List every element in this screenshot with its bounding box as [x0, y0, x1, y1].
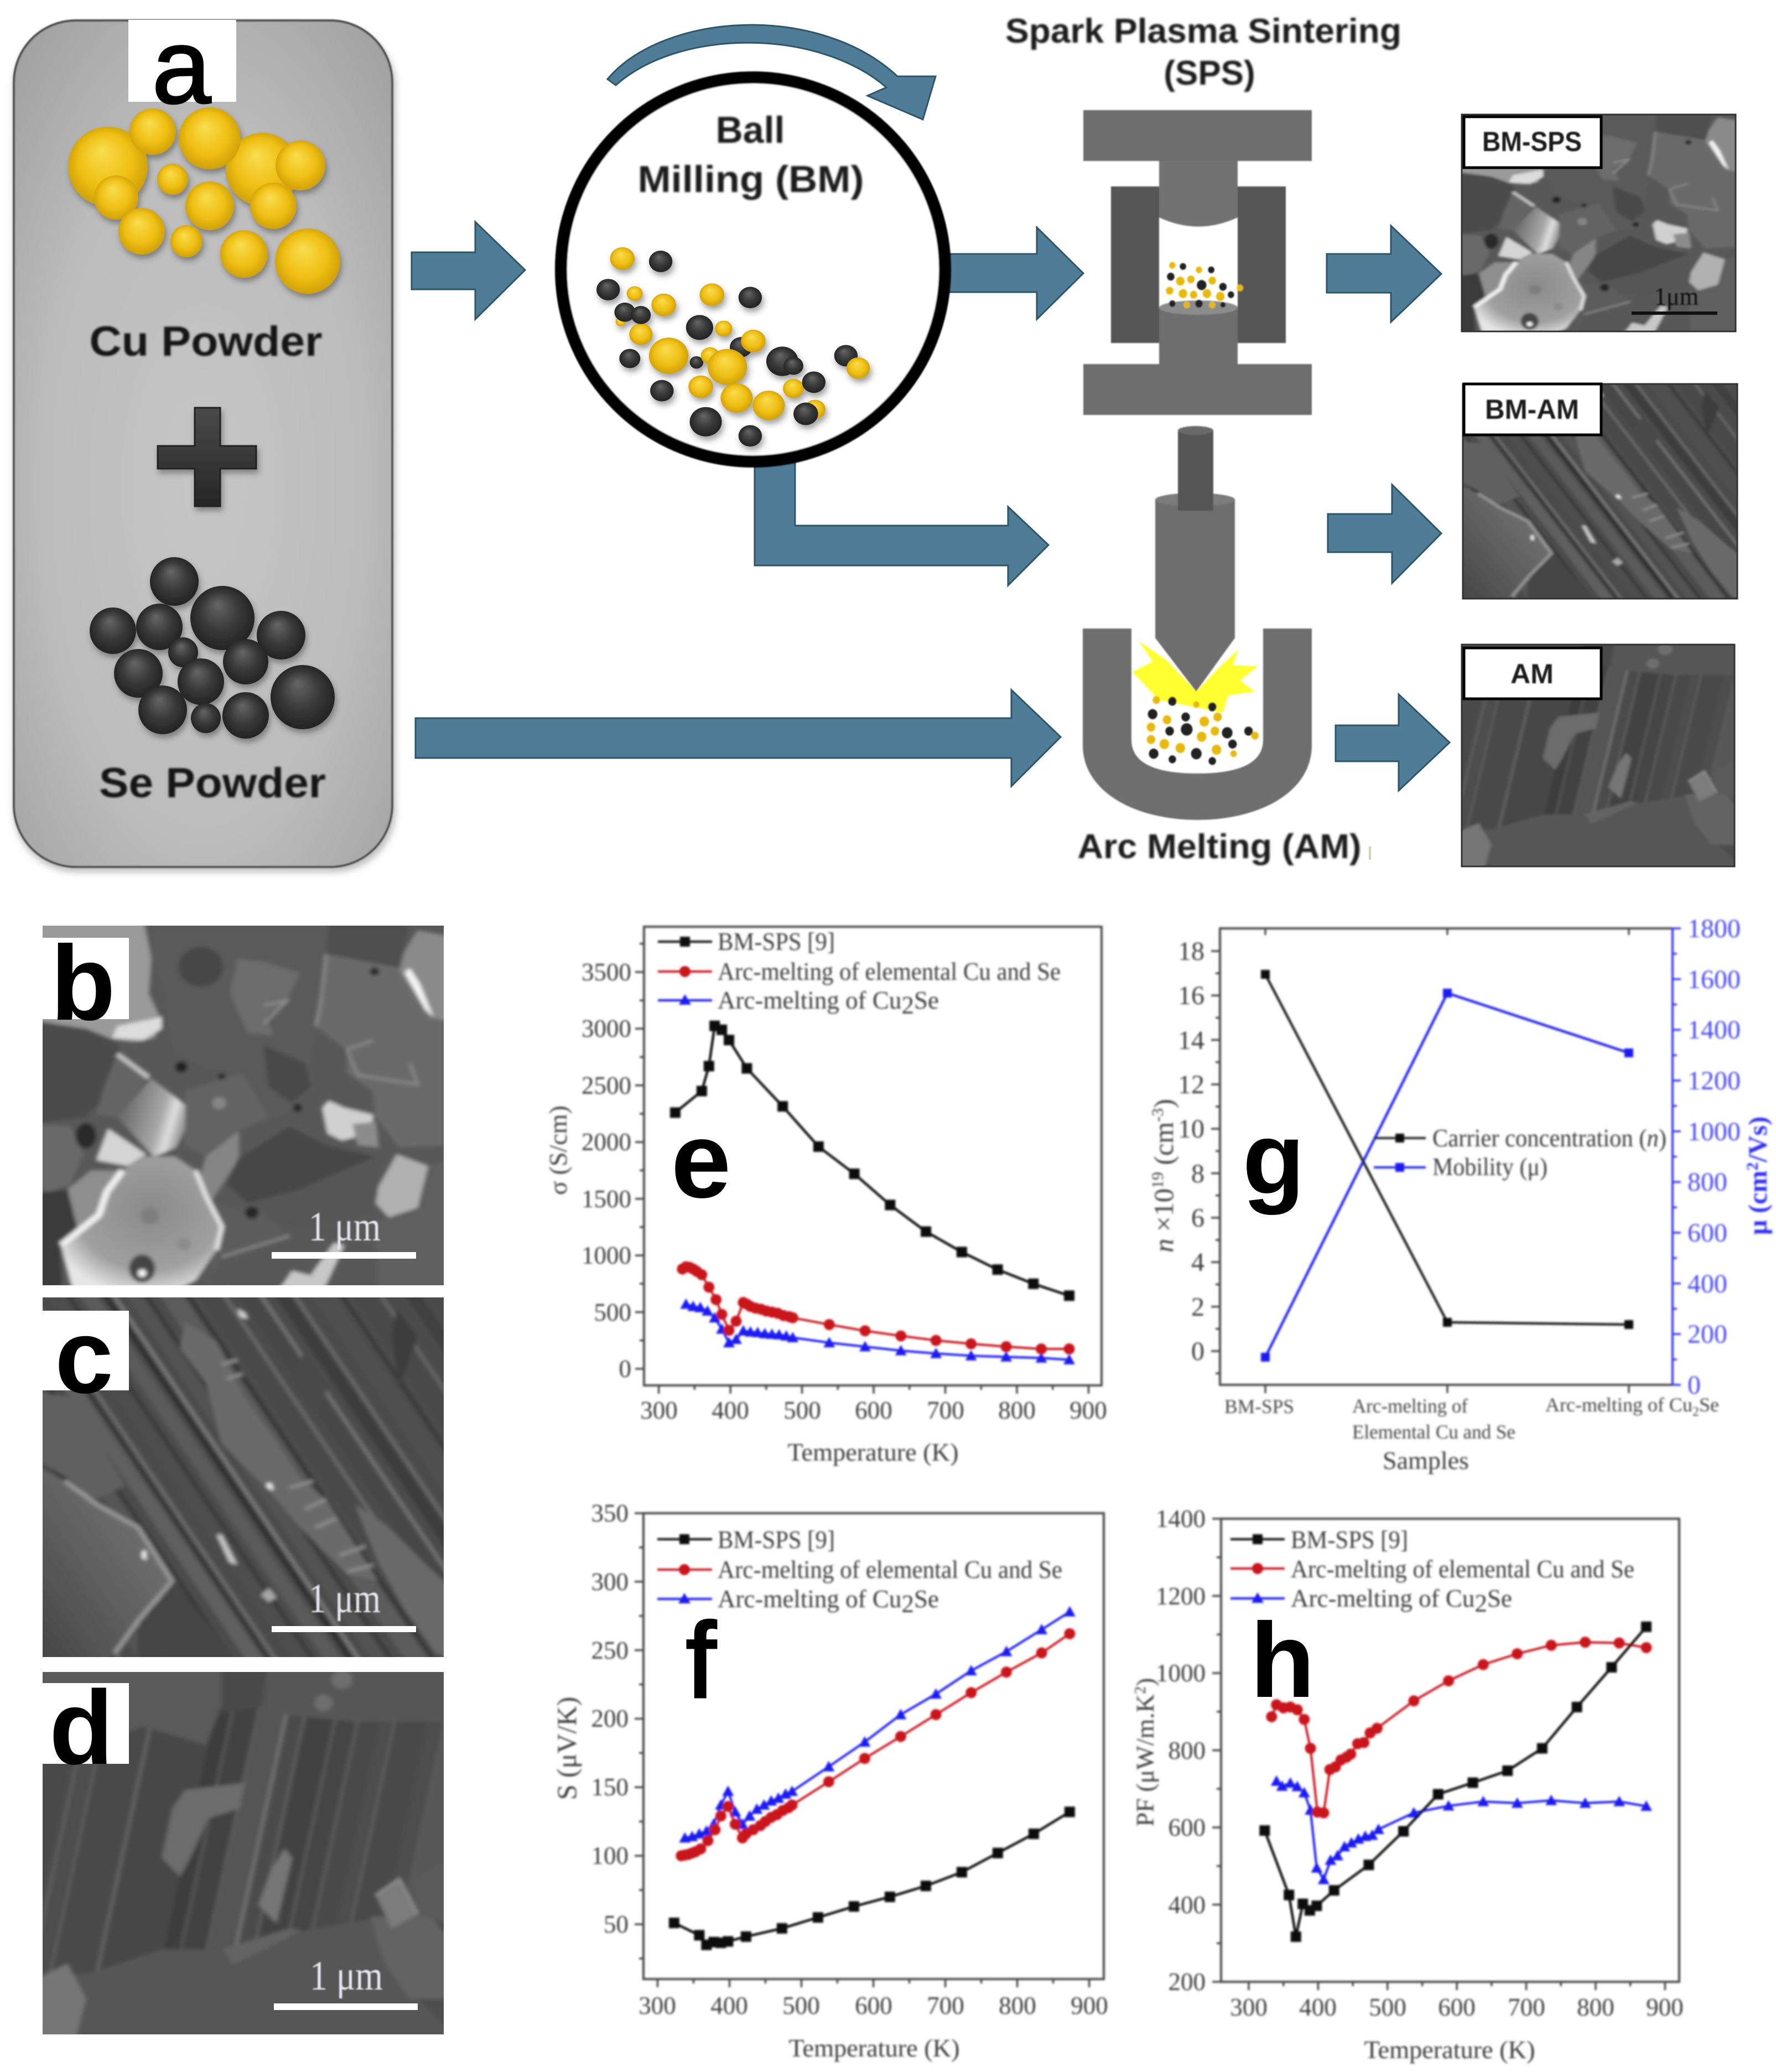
label d: d — [49, 1669, 113, 1787]
category labels g: 2 — [1692, 1405, 1699, 1419]
legend e — [658, 928, 1061, 1019]
diagram: SPS press — [1083, 110, 1312, 415]
category labels g: Se — [1699, 1394, 1719, 1416]
arrow: powders to arc melting — [416, 690, 1061, 786]
legend h: BM-SPS [9] — [1291, 1526, 1408, 1554]
tick labels e: 2000 — [581, 1128, 631, 1156]
label g: g — [1243, 1101, 1305, 1215]
tick labels f: 150 — [591, 1773, 629, 1801]
left tick labels g: 10 — [1178, 1114, 1204, 1144]
right tick labels g: 1200 — [1687, 1066, 1741, 1095]
axis titles g — [1148, 1099, 1773, 1474]
scale bar d: 1 μm — [310, 1953, 383, 1999]
left tick labels g — [1178, 937, 1204, 1366]
axis titles g: Samples — [1383, 1446, 1469, 1474]
axis titles f — [551, 1697, 959, 2062]
tick labels e: 900 — [1069, 1396, 1107, 1424]
panel a: process flow — [14, 7, 1776, 875]
right tick labels g: 400 — [1687, 1269, 1727, 1299]
tick labels f: 200 — [591, 1705, 629, 1732]
tick labels e: 700 — [927, 1396, 964, 1424]
series e — [675, 1026, 1069, 1360]
tick labels h: 600 — [1438, 1993, 1476, 2021]
axis titles g: 2 — [1743, 1162, 1762, 1171]
label b: b — [50, 923, 116, 1042]
right tick labels g: 600 — [1687, 1218, 1727, 1248]
micrograph: BM-SPS: 1μm — [1654, 282, 1699, 310]
right tick labels g: 1600 — [1687, 965, 1741, 994]
right tick labels g: 1800 — [1687, 914, 1741, 943]
tick labels f: 50 — [604, 1910, 629, 1938]
series f — [674, 1612, 1069, 1945]
axis titles f: Temperature (K) — [789, 2034, 959, 2062]
tick labels e — [581, 958, 1107, 1424]
tick labels e: 2500 — [581, 1072, 631, 1099]
tick labels e: 500 — [594, 1299, 631, 1326]
panel c: SEM micrograph — [0, 1285, 704, 1670]
axis titles h: PF (μW/m.K — [1131, 1694, 1159, 1826]
series h — [1265, 1627, 1647, 1936]
legend h: 2 — [1474, 1590, 1487, 1617]
scale bar d — [274, 1953, 418, 2010]
heading: Spark Plasma Sintering — [1005, 12, 1401, 92]
chart f: Seebeck coefficient vs temperature — [551, 1499, 1108, 2062]
tick labels h: 1400 — [1156, 1505, 1206, 1533]
tick labels e: 3500 — [581, 958, 631, 986]
arrow: ball mill to SPS — [941, 227, 1083, 319]
tick labels f: 300 — [638, 1992, 676, 2019]
right tick labels g: 0 — [1687, 1370, 1701, 1400]
label c — [43, 1298, 129, 1415]
tick labels h: 1200 — [1156, 1582, 1206, 1610]
left tick labels g: 8 — [1191, 1159, 1204, 1188]
icon: plus — [158, 408, 256, 506]
tick labels e: 1000 — [581, 1242, 631, 1269]
axis titles h — [1131, 1678, 1535, 2064]
legend g: Carrier concentration (n) — [1432, 1124, 1666, 1152]
micrograph: BM-AM — [1295, 377, 1776, 606]
tick labels e: 0 — [619, 1355, 631, 1383]
tick labels h: 800 — [1577, 1993, 1614, 2021]
icon: mixed milling balls — [596, 247, 870, 446]
heading: Spark Plasma Sintering: Spark Plasma Sintering — [1005, 12, 1401, 50]
legend f: Arc-melting of Cu — [718, 1585, 901, 1613]
tick labels f: 600 — [855, 1992, 892, 2019]
left tick labels g: 18 — [1178, 937, 1204, 966]
axis titles f: S (μV/K) — [551, 1697, 582, 1800]
axis titles g: -3 — [1149, 1108, 1167, 1122]
category labels g — [1224, 1394, 1719, 1443]
axis titles e: Temperature (K) — [788, 1438, 958, 1466]
right tick labels g: 1400 — [1687, 1015, 1741, 1045]
tick labels e: 600 — [855, 1396, 892, 1424]
micrograph: BM-AM: BM-AM — [1485, 394, 1579, 425]
left tick labels g: 16 — [1178, 981, 1204, 1010]
text: Ball Milling: Milling (BM) — [637, 158, 864, 200]
scale bar c — [272, 1576, 416, 1632]
scale bar b — [272, 1204, 416, 1259]
tick labels f: 800 — [999, 1992, 1036, 2019]
diagram: arc melting apparatus — [1083, 426, 1312, 820]
text: Arc Melting: Arc Melting (AM) — [1078, 828, 1361, 866]
tick labels e: 500 — [783, 1396, 821, 1424]
axes h — [1212, 1519, 1679, 1990]
right tick labels g: 200 — [1687, 1320, 1727, 1349]
tick labels h: 900 — [1646, 1993, 1684, 2021]
left tick labels g: 4 — [1191, 1248, 1204, 1277]
text: Cu Powder: Cu Powder — [90, 318, 322, 365]
label h: h — [1250, 1601, 1315, 1720]
label c: c — [55, 1298, 113, 1415]
left tick labels g: 6 — [1191, 1203, 1204, 1233]
text cursor mark near Arc Melting — [1369, 847, 1371, 860]
arrow: ball mill to arc melting — [755, 454, 1048, 585]
tick labels f: 250 — [591, 1637, 629, 1664]
legend h: Se — [1487, 1585, 1512, 1612]
text: Ball Milling: Ball — [716, 109, 785, 151]
text: Ball Milling — [637, 109, 864, 200]
legend e: BM-SPS [9] — [718, 928, 835, 955]
label a — [128, 7, 236, 126]
axis titles e — [544, 1105, 958, 1466]
axis titles h: Temperature (K) — [1364, 2035, 1535, 2064]
right tick labels g: 800 — [1687, 1167, 1727, 1197]
tick labels f: 350 — [591, 1499, 629, 1527]
axes e — [635, 927, 1102, 1394]
arrow: BM-AM to SEM — [1328, 485, 1441, 583]
axis titles g: μ (cm — [1743, 1171, 1773, 1235]
left tick labels g: 12 — [1178, 1070, 1204, 1099]
axis titles e: σ (S/cm) — [544, 1105, 572, 1195]
legend f: BM-SPS [9] — [718, 1526, 835, 1554]
category labels g: Arc-melting of Cu — [1545, 1394, 1692, 1416]
icon: copper powder balls — [68, 107, 340, 294]
axis titles g: (cm — [1148, 1122, 1179, 1172]
axis titles g: 19 — [1149, 1172, 1167, 1188]
legend h — [1230, 1526, 1634, 1617]
micrograph: AM — [1421, 638, 1764, 875]
tick labels h: 400 — [1169, 1891, 1206, 1919]
tick labels h: 400 — [1299, 1993, 1337, 2021]
series g — [1261, 970, 1633, 1362]
tick labels e: 3000 — [581, 1015, 631, 1042]
tick labels h: 700 — [1508, 1993, 1545, 2021]
chart e: conductivity vs temperature — [544, 927, 1107, 1466]
micrograph: AM: AM — [1510, 658, 1554, 689]
arrow: AM to SEM — [1336, 694, 1450, 791]
tick labels f: 300 — [591, 1568, 629, 1596]
tick labels e: 800 — [998, 1396, 1036, 1424]
panel b: SEM micrograph — [29, 915, 459, 1299]
tick labels f: 900 — [1071, 1992, 1108, 2019]
legend h: Arc-melting of elemental Cu and Se — [1291, 1555, 1634, 1583]
category labels g: BM-SPS — [1224, 1395, 1294, 1417]
tick labels e: 1500 — [581, 1185, 631, 1213]
tick labels f: 100 — [591, 1842, 629, 1870]
label a: a — [152, 7, 211, 126]
micrograph: BM-SPS: BM-SPS — [1482, 126, 1582, 157]
legend e: 2 — [901, 991, 914, 1019]
legend f: Se — [914, 1585, 939, 1613]
tick labels h: 600 — [1169, 1814, 1206, 1841]
legend e: Arc-melting of elemental Cu and Se — [718, 958, 1061, 985]
category labels g: Arc-melting of — [1352, 1395, 1468, 1417]
tick labels f: 500 — [782, 1992, 820, 2019]
tick labels f: 700 — [927, 1992, 964, 2019]
tick labels h: 800 — [1169, 1737, 1206, 1764]
tick labels f — [591, 1499, 1108, 2019]
left tick labels g: 2 — [1191, 1292, 1204, 1322]
tick labels h: 300 — [1230, 1993, 1268, 2021]
right tick labels g — [1687, 914, 1741, 1400]
tick labels h: 500 — [1369, 1993, 1406, 2021]
arrow: powders to ball mill — [412, 222, 525, 319]
legend f — [657, 1526, 1062, 1618]
label e: e — [671, 1100, 731, 1221]
tick labels e: 400 — [712, 1396, 749, 1424]
heading: Spark Plasma Sintering: (SPS) — [1164, 54, 1255, 92]
legend f: Arc-melting of elemental Cu and Se — [718, 1556, 1062, 1583]
left tick labels g: 14 — [1178, 1026, 1204, 1055]
text: Se Powder: Se Powder — [99, 760, 326, 807]
tick labels h: 200 — [1169, 1968, 1206, 1996]
label f: f — [686, 1601, 716, 1720]
panel: powders card — [14, 20, 396, 872]
axis titles g: ) — [1148, 1099, 1179, 1108]
arrow: SPS to SEM — [1327, 226, 1441, 322]
ball mill circle — [561, 77, 945, 461]
arrow: curved rotation — [607, 25, 936, 120]
left tick labels g: 0 — [1191, 1337, 1204, 1366]
legend e: Se — [914, 986, 939, 1014]
icon: selenium powder balls — [90, 557, 335, 739]
category labels g: Elemental Cu and Se — [1352, 1421, 1515, 1443]
scale bar c: 1 μm — [309, 1576, 381, 1622]
tick labels f: 400 — [710, 1992, 748, 2019]
legend g: Mobility (μ) — [1432, 1153, 1547, 1181]
scale bar b: 1 μm — [309, 1204, 381, 1250]
axis titles g: /Vs) — [1743, 1117, 1773, 1163]
tick labels h: 1000 — [1156, 1659, 1206, 1687]
chart h: power factor vs temperature — [1131, 1505, 1684, 2064]
axis titles g: n ×10 — [1148, 1188, 1179, 1253]
tick labels h — [1156, 1505, 1684, 2021]
legend f: 2 — [901, 1590, 914, 1618]
legend e: Arc-melting of Cu — [718, 986, 901, 1014]
legend h: Arc-melting of Cu — [1291, 1585, 1474, 1612]
axis titles h: ) — [1131, 1678, 1159, 1686]
panel d: SEM micrograph — [0, 1661, 487, 2048]
axis titles h: 2 — [1132, 1686, 1149, 1694]
right tick labels g: 1000 — [1687, 1117, 1741, 1146]
tick labels e: 300 — [640, 1396, 678, 1424]
legend g — [1374, 1124, 1666, 1181]
axes f — [635, 1513, 1104, 1987]
chart g: carrier concentration and mobility — [1148, 914, 1773, 1474]
micrograph: BM-SPS — [1452, 108, 1746, 340]
axes g — [1211, 928, 1681, 1393]
